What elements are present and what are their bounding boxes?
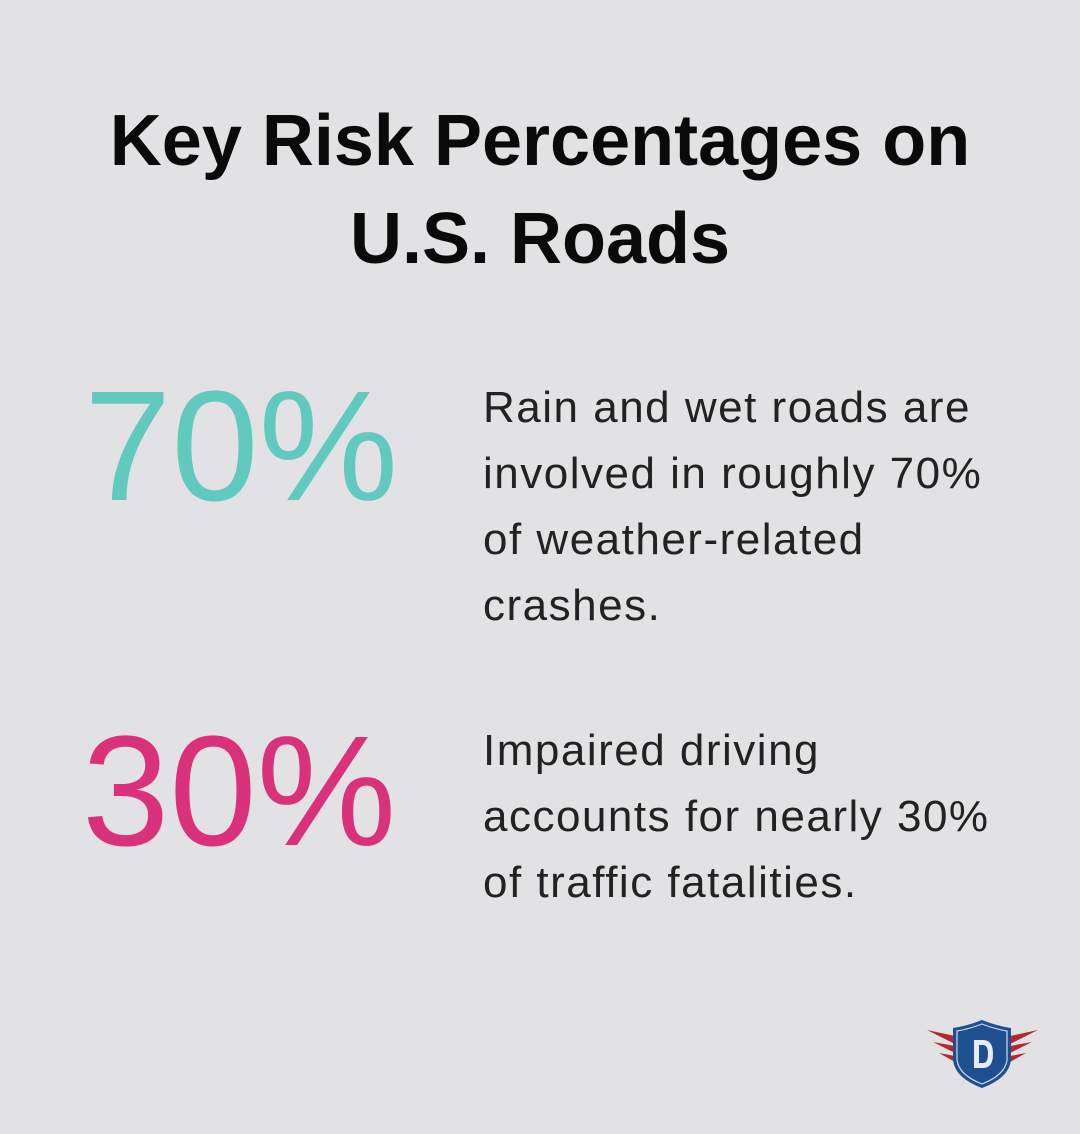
text: impaired: of traffic fatalities. [483,858,858,907]
text: rain: Rain and wet roads are [483,383,971,432]
title: U.S. Roads [350,199,730,279]
icon: logo shield [927,1020,1038,1088]
text: impaired: Impaired driving [483,726,820,775]
text: rain: of weather-related [483,515,865,564]
title: Key Risk Percentages on [110,101,970,181]
text: rain [483,383,982,630]
stat: 70%: 70% [84,359,398,534]
stat: 30%: 30% [82,704,396,879]
text: impaired [483,726,990,907]
text: impaired: accounts for nearly 30% [483,792,990,841]
text: rain: crashes. [483,581,661,630]
text: rain: involved in roughly 70% [483,449,982,498]
title [110,101,970,279]
